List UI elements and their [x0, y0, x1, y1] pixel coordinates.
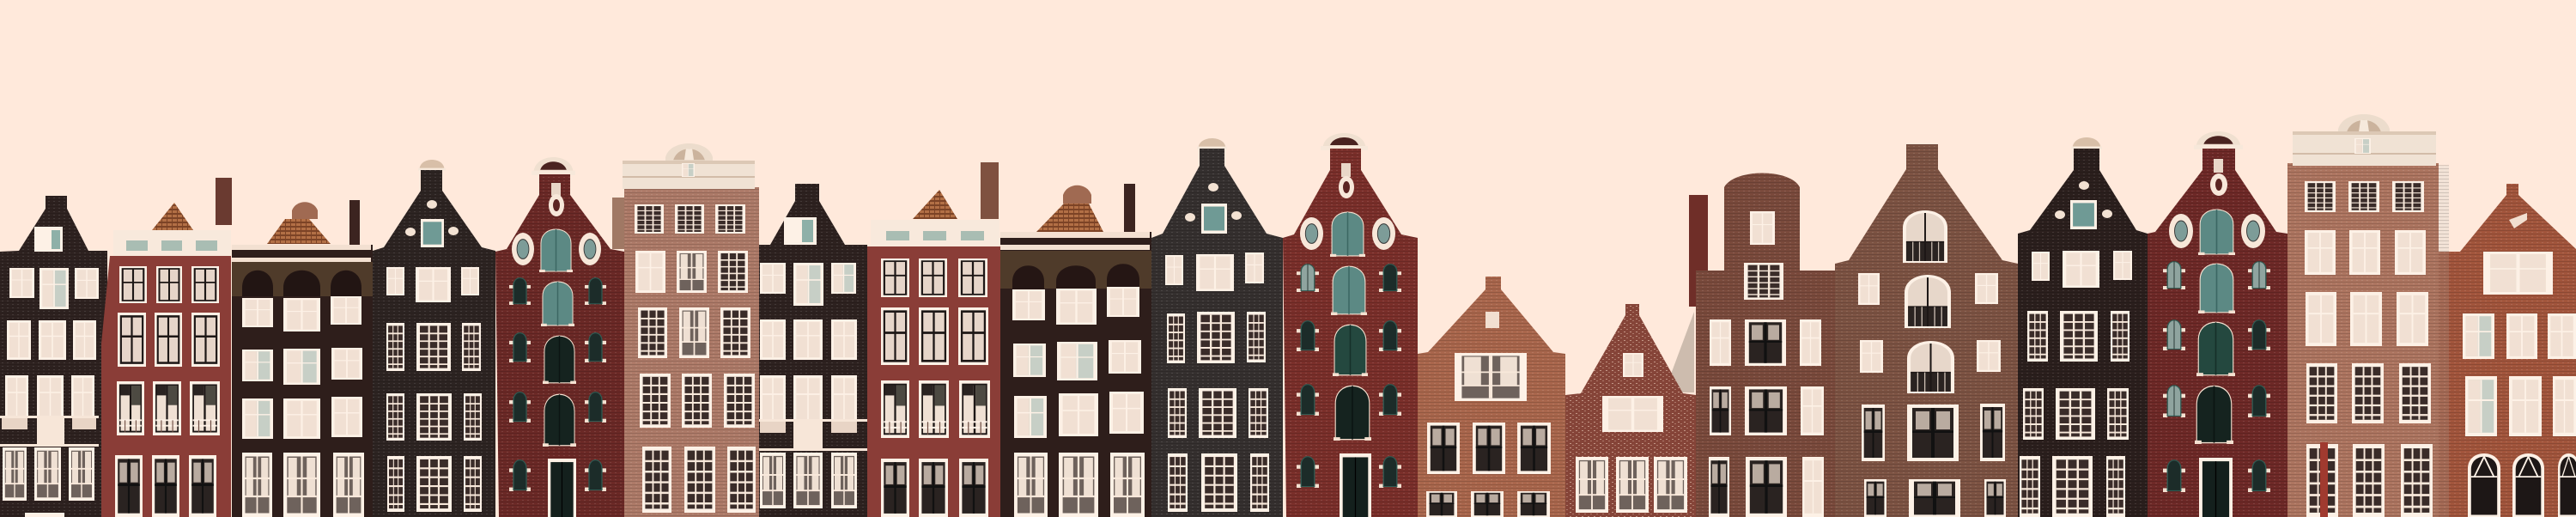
- side wall: [612, 198, 624, 249]
- side strip: [2439, 166, 2449, 252]
- chimney: [349, 200, 360, 245]
- windows: [635, 204, 756, 513]
- hoist ornament: [549, 183, 564, 216]
- side arched windows: [2163, 262, 2270, 492]
- windows: [242, 296, 364, 517]
- gable window: [2070, 200, 2097, 229]
- chimney: [216, 178, 232, 225]
- shutters: [539, 229, 576, 447]
- oculi: [1300, 217, 1395, 250]
- chimney: [1689, 195, 1708, 307]
- windows: [1165, 252, 1269, 512]
- gable window: [1201, 204, 1227, 234]
- windows: [3, 268, 99, 517]
- roof turret: [292, 202, 318, 219]
- skylights: [886, 231, 984, 240]
- hoist ornament: [1339, 163, 1354, 198]
- building 9: dark brown house: [1000, 184, 1151, 517]
- building 12: orange brick low house: [1418, 277, 1565, 517]
- building 1: dark house with balcony: [0, 196, 107, 517]
- balcony: [0, 416, 99, 447]
- side roof: [1664, 312, 1694, 392]
- top window: [2354, 138, 2371, 154]
- windows: [2463, 313, 2576, 517]
- building 8: red house: [867, 162, 1002, 517]
- cornice bands: [232, 245, 371, 262]
- facade: [2449, 184, 2576, 517]
- ornaments: [405, 200, 459, 236]
- cornice: [871, 220, 999, 246]
- gable hatch: [2509, 213, 2527, 228]
- arches: [1012, 264, 1139, 289]
- facade: [101, 256, 231, 517]
- building 6: pink brick house: [612, 143, 759, 517]
- balcony: [759, 419, 867, 451]
- building 17: red shuttered warehouse: [2148, 131, 2287, 517]
- windows: [760, 263, 857, 508]
- facade: [1565, 304, 1696, 517]
- facade: [1696, 173, 1835, 517]
- dormer: [784, 217, 817, 245]
- roof: [267, 219, 331, 244]
- dome: [1321, 133, 1368, 150]
- facade: [2287, 163, 2439, 517]
- door: [548, 459, 576, 517]
- pediment: [665, 143, 713, 164]
- lamp post: [2320, 442, 2328, 517]
- cornice: [623, 161, 755, 189]
- facade: [624, 187, 759, 517]
- facade: [0, 196, 107, 517]
- facade: [1151, 149, 1283, 517]
- arches: [242, 271, 361, 296]
- windows: [1576, 457, 1687, 513]
- large window: [1602, 396, 1663, 432]
- cornice: [2293, 131, 2436, 166]
- facade: [495, 174, 624, 517]
- facade: [2018, 149, 2148, 517]
- large window: [2483, 252, 2553, 295]
- building 2: red house: [101, 178, 232, 517]
- facade: [2148, 149, 2287, 517]
- roof: [1036, 204, 1103, 232]
- building 13: speckled brick low house: [1565, 304, 1696, 517]
- windows: [881, 258, 990, 517]
- dome: [2071, 137, 2102, 149]
- oculi: [512, 233, 601, 265]
- cornice: [113, 230, 231, 256]
- windows: [2305, 181, 2433, 517]
- building 15: brick house with arched balconies: [1835, 144, 2018, 517]
- building 3: dark brown house: [232, 200, 373, 517]
- building 16: dark gabled house: [2018, 137, 2148, 517]
- shutters: [2195, 210, 2235, 444]
- windows: [1012, 287, 1145, 517]
- arched balcony windows: [1903, 210, 1954, 393]
- facade: [1283, 149, 1418, 517]
- dome: [418, 160, 446, 171]
- windows: [115, 266, 220, 517]
- building 14: brick tower house: [1689, 173, 1835, 517]
- building 11: red shuttered warehouse: [1283, 133, 1418, 517]
- large window: [1455, 353, 1527, 401]
- building 5: dark red shuttered warehouse: [495, 157, 624, 517]
- dormer: [34, 227, 63, 252]
- door: [2199, 458, 2233, 517]
- roof turret: [1063, 186, 1091, 204]
- gable window: [421, 219, 444, 247]
- door: [1340, 453, 1371, 517]
- facade: [1835, 144, 2018, 517]
- ornaments: [1185, 183, 1242, 222]
- gable window: [1623, 353, 1643, 377]
- building 10: charcoal gabled house: [1151, 138, 1283, 517]
- building 4: dark gabled house: [373, 160, 495, 517]
- building 19: orange brick house: [2449, 184, 2576, 517]
- windows: [2020, 251, 2132, 517]
- building 7: dark house with balcony: [759, 184, 867, 517]
- cornice bands: [1000, 232, 1150, 250]
- skylights: [126, 240, 217, 251]
- facade: [867, 246, 1002, 517]
- chimney: [1124, 184, 1135, 232]
- side arched windows: [509, 278, 606, 491]
- shutters: [1330, 212, 1371, 441]
- windows: [1858, 273, 2006, 517]
- building 18: pink brick house: [2287, 114, 2449, 517]
- facade: [759, 184, 867, 517]
- top window: [682, 163, 695, 177]
- ornaments: [2055, 181, 2112, 219]
- windows: [1426, 423, 1551, 517]
- facade: [232, 245, 373, 517]
- roof: [913, 190, 957, 219]
- roof: [152, 203, 193, 230]
- windows: [386, 267, 482, 512]
- chimney: [981, 162, 999, 219]
- facade: [373, 170, 495, 517]
- windows: [1709, 263, 1824, 517]
- dome: [1197, 138, 1227, 149]
- gable hatch: [1485, 312, 1499, 328]
- facade: [1418, 277, 1565, 517]
- dome: [532, 157, 575, 175]
- facade: [1000, 232, 1151, 517]
- pediment: [2338, 114, 2390, 137]
- oculi: [2169, 214, 2265, 248]
- side arched windows: [1297, 265, 1401, 488]
- tower window: [1750, 211, 1775, 245]
- hoist ornament: [2210, 159, 2227, 196]
- dome: [2194, 131, 2243, 149]
